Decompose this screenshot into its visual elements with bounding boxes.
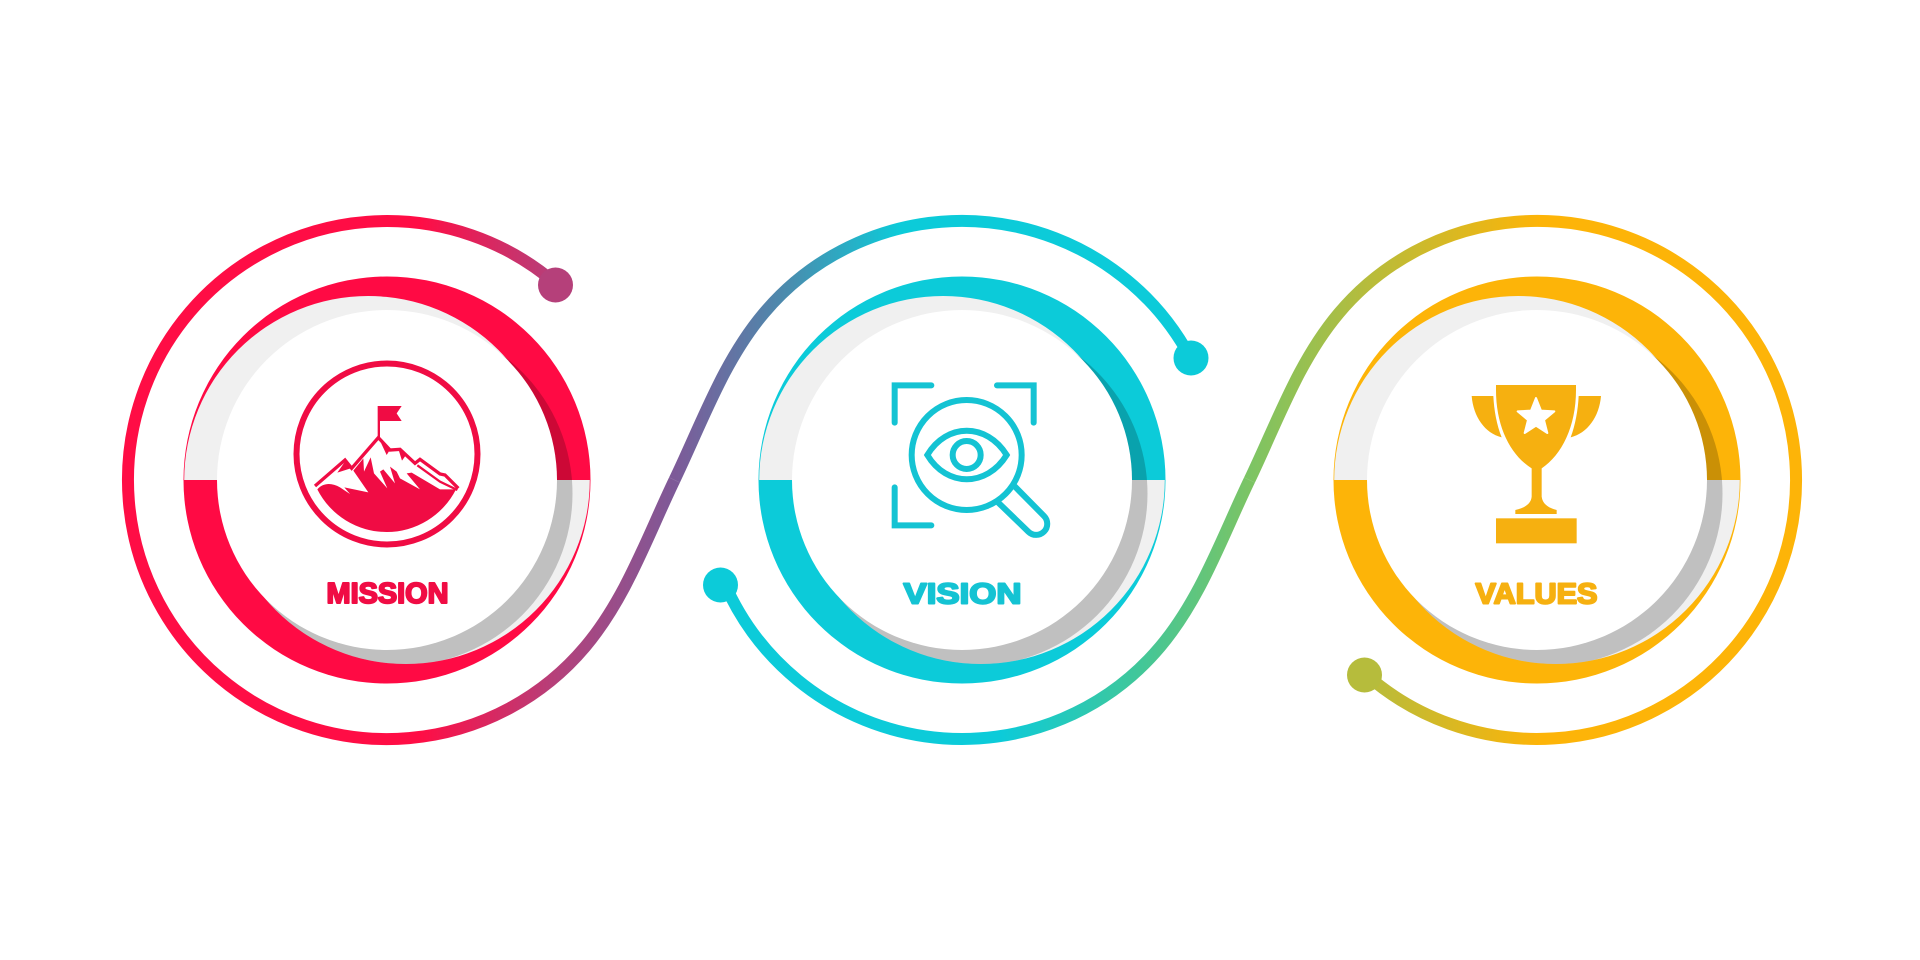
ring: mission [184,276,590,684]
label: values: VALUES [1476,578,1598,610]
connector line: vision upper arc [674,221,1208,480]
icon: eye in magnifying glass [895,385,1047,535]
infographic [122,214,1802,746]
ring: vision [758,276,1166,684]
label: vision: VISION [904,578,1022,610]
icon: mountain with flag [296,364,478,544]
ring: values [1334,276,1740,684]
label: mission: MISSION [326,578,448,610]
connector line: values spiral [1250,221,1796,739]
icon: trophy [1472,385,1601,543]
connector line: vision lower arc [703,480,1250,739]
connector line: mission spiral [128,221,675,739]
